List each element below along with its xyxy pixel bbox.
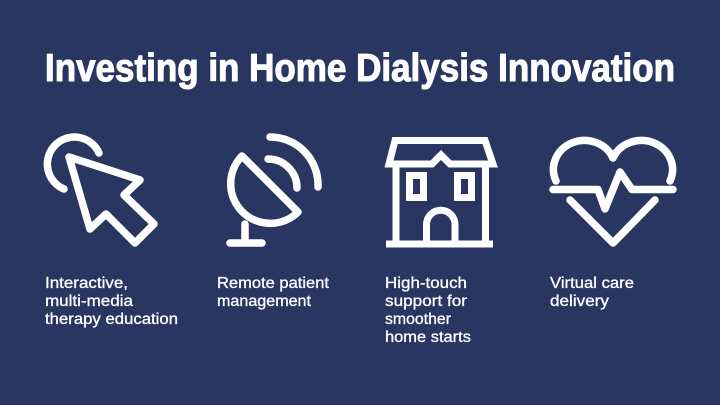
text: interactive education: Interactive, [45,275,128,292]
icon: house [386,140,493,244]
text: virtual care delivery [550,275,634,310]
icon: cursor click [47,137,154,243]
text: high-touch support: home starts [385,329,471,346]
text: virtual care delivery: delivery [550,293,609,310]
text: virtual care delivery: Virtual care [550,275,634,292]
text: high-touch support: High-touch [385,275,467,292]
text: high-touch support: smoother [385,311,451,328]
icon: heart with pulse [553,140,673,243]
text: interactive education: multi-media [45,293,133,310]
text: interactive education: therapy education [45,311,178,328]
text: high-touch support: support for [385,293,467,310]
text: high-touch support [385,275,471,346]
text: remote patient management [217,275,330,310]
text: interactive education [45,275,178,328]
icon: satellite dish [230,137,318,243]
text: remote patient management: Remote patient [217,275,330,292]
text: remote patient management: management [217,293,312,310]
